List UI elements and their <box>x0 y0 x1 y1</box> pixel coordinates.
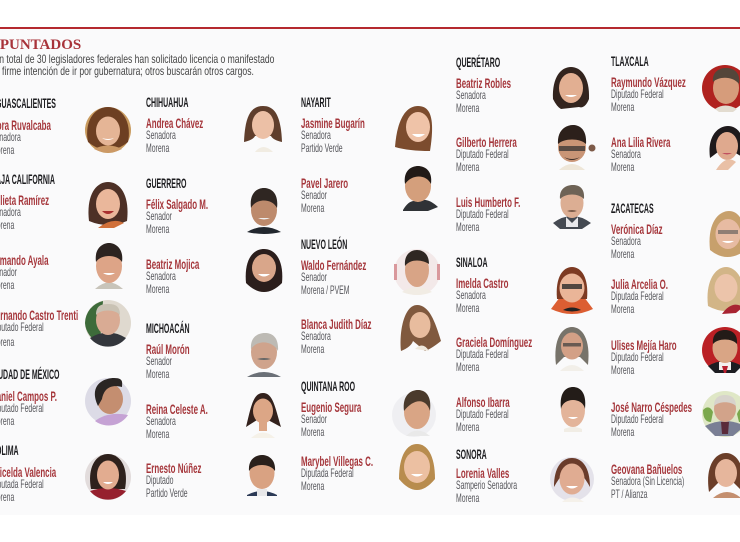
entry: Verónica Díaz: Verónica Díaz <box>611 221 663 237</box>
portrait: Graciela Domínguez <box>555 327 589 371</box>
heading: Chihuahua: CHIHUAHUA <box>146 94 188 110</box>
entry: Verónica Díaz: Morena <box>611 247 634 261</box>
portrait: Imelda Castro <box>551 267 593 314</box>
entry: Beatriz Robles <box>456 75 511 115</box>
entry: Raymundo Vázquez: Morena <box>611 100 634 114</box>
portrait: Beatriz Robles <box>553 67 589 109</box>
entry: Imelda Castro <box>456 275 508 315</box>
portrait: Verónica Díaz <box>710 211 740 257</box>
entry: Raúl Morón: Senador <box>146 354 172 368</box>
entry: Andrea Chávez: Morena <box>146 141 169 155</box>
entry: Alfonso Ibarra: Diputado Federal <box>456 407 509 421</box>
portrait: Ulises Mejía Haro <box>702 327 740 373</box>
entry: Marybel Villegas C.: Morena <box>301 479 324 493</box>
entry: Gilberto Herrera: Diputado Federal <box>456 147 509 161</box>
portrait: Ana Lilia Rivera <box>709 126 740 170</box>
entry: José Narro Céspedes <box>611 400 740 440</box>
entry: Blanca Judith Díaz <box>301 316 372 356</box>
heading: Nuevo León: NUEVO LEÓN <box>301 236 347 252</box>
entry: Ana Lilia Rivera: Senadora <box>611 147 641 161</box>
entry: Beatriz Mojica <box>146 256 200 296</box>
entry: Imelda Castro: Senadora <box>456 288 486 302</box>
entry: Pavel Jarero: Pavel Jarero <box>301 175 348 191</box>
entry: Ana Lilia Rivera <box>611 135 740 175</box>
portrait: Armando Ayala <box>95 243 123 289</box>
intro text line 2: la firme intención de ir por gubernatura; otros buscarán otros cargos. <box>0 64 254 78</box>
entry: Julia Arcelia O.: Morena <box>611 302 634 316</box>
entry: Armando Ayala <box>0 252 49 292</box>
entry: Luis Humberto F.: Morena <box>456 220 479 234</box>
portrait: Gilberto Herrera <box>558 125 596 170</box>
heading: Sonora: SONORA <box>456 446 487 462</box>
heading: Zacatecas: ZACATECAS <box>611 200 654 216</box>
entry: Imelda Castro: Imelda Castro <box>456 275 508 291</box>
portrait: Jasmine Bugarín <box>395 106 432 151</box>
portrait: Ernesto Núñez <box>247 455 277 496</box>
entry: Jasmine Bugarín: Senadora <box>301 128 331 142</box>
entry: Geovana Bañuelos <box>611 462 740 502</box>
entry: Raymundo Vázquez <box>611 74 686 114</box>
entry: Luis Humberto F.: Luis Humberto F. <box>456 194 520 210</box>
entry: Pavel Jarero: Senador <box>301 188 327 202</box>
entry: Nora Ruvalcaba <box>0 117 51 157</box>
heading: Sinaloa: SINALOA <box>456 254 488 270</box>
portrait: Nora Ruvalcaba <box>85 107 131 153</box>
entry: Reina Celeste A.: Morena <box>146 427 169 441</box>
entry: Ana Lilia Rivera: Ana Lilia Rivera <box>611 134 670 150</box>
portrait: Julia Arcelia O. <box>707 267 740 314</box>
entry: Blanca Judith Díaz: Senadora <box>301 329 331 343</box>
entry: Blanca Judith Díaz: Blanca Judith Díaz <box>301 316 371 332</box>
entry: Waldo Fernández <box>301 257 366 297</box>
portrait: Alfonso Ibarra <box>561 387 585 432</box>
intro text line 1: Un total de 30 legisladores federales han solicitado licencia o manifestado <box>0 52 274 66</box>
entry: Luis Humberto F.: Diputado Federal <box>456 207 509 221</box>
entry: Beatriz Mojica: Senadora <box>146 269 176 283</box>
entry: Graciela Domínguez: Diputada Federal <box>456 347 509 361</box>
entry: Jasmine Bugarín: Jasmine Bugarín <box>301 115 365 131</box>
entry: Alfonso Ibarra: Morena <box>456 420 479 434</box>
entry: Félix Salgado M.: Félix Salgado M. <box>146 196 208 212</box>
portrait: José Narro Céspedes <box>702 391 740 437</box>
portrait: Blanca Judith Díaz <box>401 305 441 351</box>
entry: Andrea Chávez <box>146 115 203 155</box>
entry: Julieta Ramírez <box>0 192 49 232</box>
entry: Gilberto Herrera <box>456 134 517 174</box>
portrait: Raúl Morón <box>247 333 281 377</box>
entry: Waldo Fernández: Waldo Fernández <box>301 257 366 273</box>
portrait: Pavel Jarero <box>403 166 438 211</box>
entry: Gilberto Herrera: Gilberto Herrera <box>456 134 517 150</box>
entry: Gilberto Herrera: Morena <box>456 160 479 174</box>
entry: Félix Salgado M.: Morena <box>146 222 169 236</box>
entry: Andrea Chávez: Andrea Chávez <box>146 115 203 131</box>
entry: Geovana Bañuelos: Geovana Bañuelos <box>611 461 682 477</box>
portrait: Julieta Ramírez <box>88 182 128 228</box>
entry: Reina Celeste A.: Senadora <box>146 414 176 428</box>
portrait: Reina Celeste A. <box>246 393 281 438</box>
entry: Beatriz Robles: Senadora <box>456 88 486 102</box>
entry: Raúl Morón: Raúl Morón <box>146 341 190 357</box>
entry: Eugenio Segura: Eugenio Segura <box>301 399 361 415</box>
entry: Eugenio Segura: Morena <box>301 425 324 439</box>
entry: Julia Arcelia O.: Julia Arcelia O. <box>611 276 668 292</box>
entry: Pavel Jarero <box>301 175 348 215</box>
entry: Ernesto Núñez: Partido Verde <box>146 486 188 500</box>
entry: Luis Humberto F. <box>456 194 520 234</box>
entry: Pavel Jarero: Morena <box>301 201 324 215</box>
portrait: Marybel Villegas C. <box>399 444 435 490</box>
portrait: Fernando Castro Trenti <box>85 300 131 347</box>
entry: Graciela Domínguez: Morena <box>456 360 479 374</box>
heading: Michoacán: MICHOACÁN <box>146 320 190 336</box>
portrait: Eugenio Segura <box>392 390 436 437</box>
portrait: Luis Humberto F. <box>553 185 591 229</box>
entry: Ernesto Núñez: Ernesto Núñez <box>146 460 201 476</box>
entry: Raúl Morón <box>146 341 190 381</box>
entry: Eugenio Segura: Senador <box>301 412 327 426</box>
portrait: Beatriz Mojica <box>246 249 282 292</box>
entry: Lorenia Valles: Morena <box>456 491 479 505</box>
entry: Ernesto Núñez <box>146 460 202 500</box>
entry: Alfonso Ibarra <box>456 394 510 434</box>
entry: Ulises Mejía Haro: Diputado Federal <box>611 350 664 364</box>
entry: Graciela Domínguez: Graciela Domínguez <box>456 334 532 350</box>
entry: Aricelda Valencia <box>0 464 56 504</box>
entry: Ulises Mejía Haro <box>611 338 740 378</box>
entry: Daniel Campos P. <box>0 388 57 428</box>
entry: Ana Lilia Rivera: Morena <box>611 160 634 174</box>
entry: Raymundo Vázquez: Diputado Federal <box>611 87 664 101</box>
entry: Geovana Bañuelos: PT / Alianza <box>611 487 648 501</box>
entry: Verónica Díaz: Senadora <box>611 234 641 248</box>
entry: Raúl Morón: Morena <box>146 367 169 381</box>
entry: Félix Salgado M. <box>146 196 208 236</box>
entry: Ernesto Núñez: Diputado <box>146 473 173 487</box>
heading: Tlaxcala: TLAXCALA <box>611 53 649 69</box>
entry: Geovana Bañuelos: Senadora (Sin Licencia) <box>611 474 684 488</box>
entry: Blanca Judith Díaz: Morena <box>301 342 324 356</box>
entry: Ulises Mejía Haro: Morena <box>611 363 634 377</box>
entry: Marybel Villegas C.: Marybel Villegas C. <box>301 453 373 469</box>
heading: Querétaro: QUERÉTARO <box>456 54 500 70</box>
entry: Waldo Fernández: Morena / PVEM <box>301 283 349 297</box>
heading: Quintana Roo: QUINTANA ROO <box>301 378 355 394</box>
entry: Marybel Villegas C.: Diputada Federal <box>301 466 354 480</box>
entry: Reina Celeste A. <box>146 401 208 441</box>
entry: Lorenia Valles <box>456 465 518 505</box>
entry: Beatriz Robles: Beatriz Robles <box>456 75 511 91</box>
portrait: Daniel Campos P. <box>85 378 131 426</box>
portrait: Waldo Fernández <box>394 249 440 295</box>
portrait: Andrea Chávez <box>244 106 282 152</box>
entry: Julia Arcelia O. <box>611 277 740 317</box>
entry: Marybel Villegas C. <box>301 453 373 493</box>
entry: José Narro Céspedes: José Narro Céspedes <box>611 399 692 415</box>
heading: Nayarit: NAYARIT <box>301 94 331 110</box>
entry: Lorenia Valles: Samperio Senadora <box>456 478 517 492</box>
entry: José Narro Céspedes: Morena <box>611 425 634 439</box>
entry: Andrea Chávez: Senadora <box>146 128 176 142</box>
heading: Guerrero: GUERRERO <box>146 175 186 191</box>
entry: Raymundo Vázquez: Raymundo Vázquez <box>611 74 686 90</box>
entry: Waldo Fernández: Senador <box>301 270 327 284</box>
portrait: Raymundo Vázquez <box>702 65 740 112</box>
entry: Jasmine Bugarín <box>301 115 365 155</box>
entry: Verónica Díaz <box>611 222 740 262</box>
entry: Julia Arcelia O.: Diputada Federal <box>611 289 664 303</box>
entry: Beatriz Mojica: Morena <box>146 282 169 296</box>
entry: Félix Salgado M.: Senador <box>146 209 172 223</box>
entry: Alfonso Ibarra: Alfonso Ibarra <box>456 394 510 410</box>
entry: Beatriz Robles: Morena <box>456 101 479 115</box>
portrait: Lorenia Valles <box>550 457 594 502</box>
entry: Fernando Castro Trenti <box>0 307 78 349</box>
entry: Jasmine Bugarín: Partido Verde <box>301 141 343 155</box>
entry: Beatriz Mojica: Beatriz Mojica <box>146 256 199 272</box>
entry: José Narro Céspedes: Diputado Federal <box>611 412 664 426</box>
entry: Graciela Domínguez <box>456 334 532 374</box>
portrait: Geovana Bañuelos <box>708 453 740 498</box>
portrait: Félix Salgado M. <box>247 188 281 234</box>
entry: Reina Celeste A.: Reina Celeste A. <box>146 401 208 417</box>
entry: Eugenio Segura <box>301 399 362 439</box>
entry: Lorenia Valles: Lorenia Valles <box>456 465 509 481</box>
entry: Ulises Mejía Haro: Ulises Mejía Haro <box>611 337 677 353</box>
entry: Imelda Castro: Morena <box>456 301 479 315</box>
portrait: Aricelda Valencia <box>85 454 131 500</box>
